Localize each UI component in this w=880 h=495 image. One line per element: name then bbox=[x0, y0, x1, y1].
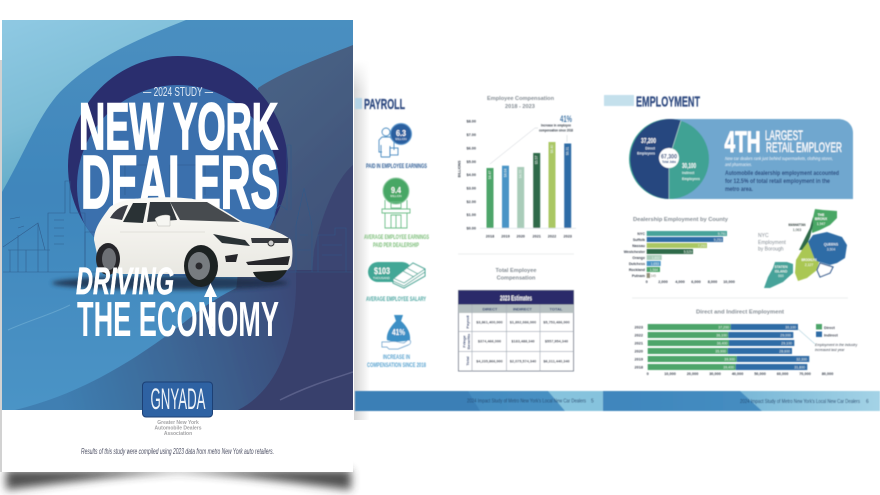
association name bbox=[155, 420, 202, 437]
panel: employment bbox=[604, 94, 857, 376]
map: NYC employment by borough: THE bbox=[818, 213, 825, 217]
icon: money bag with 41 percent in hand: 41% bbox=[392, 328, 405, 337]
x axis labels: 10,000 bbox=[664, 372, 676, 376]
year labels: 2018 bbox=[635, 366, 643, 370]
title: 2024 study: — 2024 STUDY — bbox=[143, 85, 213, 99]
y axis labels: $1.00 bbox=[466, 213, 476, 217]
table column headers: INDIRECT bbox=[513, 306, 532, 312]
year labels: 2022 bbox=[635, 334, 643, 338]
table row labels: Payroll bbox=[465, 315, 470, 329]
payroll heading bbox=[355, 97, 405, 113]
bar values: 39,900 bbox=[724, 358, 735, 362]
largest retail employer: LARGEST bbox=[765, 127, 803, 143]
pie chart: direct vs indirect: Total Jobs bbox=[662, 160, 676, 164]
footer band: left page bbox=[355, 391, 603, 411]
page gutter shade bbox=[354, 60, 370, 420]
borough: Queens bbox=[808, 232, 847, 265]
x axis: 2018 bbox=[486, 234, 494, 238]
retail note: New car dealers rank just behind supermarkets, clothing stores, bbox=[725, 156, 833, 161]
county values: 1,564 bbox=[650, 268, 658, 272]
county axis bbox=[646, 280, 735, 284]
footer band: right page: 6 bbox=[866, 399, 869, 405]
county names: Nassau bbox=[632, 244, 645, 248]
legend bbox=[816, 324, 838, 338]
city skyline bbox=[3, 145, 352, 272]
table values: $1,892,086,000 bbox=[510, 320, 536, 324]
Jamaica Bay islands bbox=[817, 263, 833, 277]
payroll stat label: PAID IN EMPLOYEE EARNINGS bbox=[366, 163, 427, 170]
white SUV car bbox=[52, 197, 292, 290]
county values: 9,791 bbox=[718, 232, 726, 236]
title: The Economy: THE ECONOMY bbox=[77, 293, 279, 347]
association name: Association bbox=[164, 431, 192, 437]
x axis labels: 0 bbox=[647, 372, 649, 376]
annotation: Employment in the industry bbox=[815, 343, 857, 347]
retail note: and pharmacies. bbox=[725, 162, 752, 167]
borough: Brooklyn bbox=[795, 242, 819, 281]
payroll stat label: AVERAGE EMPLOYEE SALARY bbox=[366, 296, 427, 303]
pie chart: direct vs indirect: Direct bbox=[645, 146, 656, 150]
x axis labels: 30,000 bbox=[709, 372, 721, 376]
employment heading: EMPLOYMENT bbox=[636, 94, 700, 110]
bars bbox=[486, 142, 571, 228]
county names: Suffolk bbox=[633, 238, 645, 242]
bar value labels: $6.31 bbox=[566, 147, 570, 155]
annotation: increased last year bbox=[815, 348, 845, 352]
footer band: left page: 5 bbox=[591, 398, 594, 404]
table title bbox=[496, 268, 536, 282]
bar value labels: $4.64 bbox=[504, 169, 508, 177]
icon: employee with 6.3 million badge: MILLION bbox=[395, 137, 407, 141]
year labels: 2020 bbox=[635, 350, 643, 354]
year labels: 2023 bbox=[635, 326, 643, 330]
association name: Automobile Dealers bbox=[155, 426, 202, 432]
bar chart: dealership employment by county: Dealership Employment by County bbox=[633, 217, 729, 223]
map title: Employment bbox=[758, 240, 786, 246]
bar values: 31,800 bbox=[794, 366, 805, 370]
county names: Dutchess bbox=[629, 262, 645, 266]
payroll stat label: INCREASE IN bbox=[383, 354, 410, 361]
table values: $557,954,340 bbox=[545, 340, 568, 344]
stacked bar chart: direct and indirect employment bbox=[635, 310, 857, 376]
pie chart: direct vs indirect: 37,200 bbox=[641, 138, 656, 145]
y axis labels: $2.00 bbox=[466, 200, 476, 204]
title: Dealers: DEALERS bbox=[81, 140, 278, 224]
bar chart: dealership employment by county bbox=[624, 217, 735, 284]
pie chart: direct vs indirect bbox=[629, 119, 709, 199]
county axis: 6,000 bbox=[691, 280, 701, 284]
county axis: 0 bbox=[646, 280, 648, 284]
retail share statement: metro area. bbox=[725, 186, 753, 193]
y axis labels: $4.00 bbox=[466, 173, 476, 177]
x axis: 2019 bbox=[501, 234, 510, 238]
map: NYC employment by borough: STATEN bbox=[774, 265, 788, 269]
callout: 41 percent increase bbox=[490, 114, 573, 164]
bar values: 32,300 bbox=[796, 358, 807, 362]
bar chart: employee compensation bbox=[458, 96, 576, 254]
table values: $3,861,400,000 bbox=[476, 320, 503, 324]
pie chart: direct vs indirect: 30,100 bbox=[682, 163, 696, 170]
panel: payroll bbox=[355, 97, 429, 369]
chart title: 2018 - 2023 bbox=[505, 104, 535, 110]
county names: Westchester bbox=[624, 250, 646, 254]
4th: 4TH bbox=[724, 126, 760, 159]
book shadow bbox=[0, 60, 351, 490]
arrow up bbox=[204, 283, 217, 334]
county names: Rockland bbox=[629, 268, 645, 272]
county values: 7,293 bbox=[698, 244, 706, 248]
map: NYC employment by borough: 1,063 bbox=[793, 228, 801, 232]
footer band: right page: 2024 Impact Study of Metro New York's Local New Car Dealers bbox=[740, 399, 860, 405]
icon: money stack with 103 thousand pill bbox=[368, 262, 425, 288]
GNYADA license plate logo bbox=[142, 382, 212, 417]
county values: 345 bbox=[650, 274, 656, 278]
table: total employee compensation bbox=[458, 268, 574, 371]
borough: Staten Island bbox=[764, 262, 793, 288]
association name: Greater New York bbox=[157, 420, 199, 426]
bar value labels: $4.47 bbox=[488, 171, 492, 179]
panel: magazine cover: GNYADA bbox=[150, 383, 206, 416]
county values bbox=[650, 232, 726, 278]
white footer strip bbox=[2, 410, 353, 472]
pie chart: direct vs indirect: Employees bbox=[637, 152, 655, 156]
icon: money stack with 103 thousand pill: THOUSAND bbox=[373, 276, 391, 280]
bar value labels: $4.55 bbox=[519, 170, 523, 178]
y axis labels: $5.00 bbox=[466, 160, 476, 164]
table column headers: TOTAL bbox=[550, 306, 563, 312]
retail note bbox=[725, 156, 833, 167]
payroll stat label: COMPENSATION SINCE 2018 bbox=[367, 362, 426, 369]
bar values: 39,400 bbox=[723, 366, 734, 370]
footer band: right page bbox=[603, 391, 880, 411]
map: NYC employment by borough: QUEENS bbox=[824, 242, 839, 246]
county values: 1,802 bbox=[652, 256, 660, 260]
icon: employee with 6.3 million badge: 6.3 bbox=[396, 128, 406, 138]
table values: $6,311,440,340 bbox=[543, 360, 570, 364]
county values: 9,253 bbox=[714, 238, 722, 242]
county names: NYC bbox=[637, 232, 645, 236]
bar values: 28,600 bbox=[779, 350, 790, 354]
payroll heading: PAYROLL bbox=[364, 97, 405, 113]
bar values: 29,100 bbox=[781, 342, 792, 346]
bar value labels: $5.57 bbox=[535, 156, 539, 164]
table title: Total Employee bbox=[496, 268, 536, 274]
x axis labels: 70,000 bbox=[799, 372, 811, 376]
map: NYC employment by borough: BRONX bbox=[815, 217, 828, 221]
table row labels: Benefits bbox=[466, 333, 471, 349]
y axis labels: $7.00 bbox=[466, 133, 476, 137]
county axis: 4,000 bbox=[675, 280, 685, 284]
callout: 41 percent increase: Increase in employee bbox=[541, 124, 571, 128]
x axis: 2022 bbox=[548, 234, 556, 238]
bar values: 29,000 bbox=[780, 334, 791, 338]
table values: $183,488,340 bbox=[511, 340, 535, 344]
title: New York: NEW YORK bbox=[79, 89, 278, 163]
x axis: 2020 bbox=[516, 234, 525, 238]
bar values: 35,900 bbox=[715, 350, 726, 354]
pie chart: direct vs indirect: Employees bbox=[682, 177, 700, 181]
y axis title: BILLIONS bbox=[458, 160, 462, 177]
map: NYC employment by borough: 3,504 bbox=[827, 248, 835, 252]
county values: 1,653 bbox=[651, 262, 659, 266]
table values: $4,235,866,000 bbox=[476, 360, 503, 364]
bar values: 36,400 bbox=[717, 342, 728, 346]
table row labels: Fringe bbox=[462, 335, 466, 348]
cover background bbox=[2, 20, 353, 410]
table column headers: DIRECT bbox=[483, 306, 498, 312]
y axis labels: $6.00 bbox=[466, 146, 476, 150]
legend: Direct bbox=[824, 326, 835, 330]
chart title bbox=[487, 96, 555, 110]
stacked bar chart: direct and indirect employment: Direct and Indirect Employment bbox=[696, 310, 784, 316]
y axis labels: $8.00 bbox=[466, 120, 476, 124]
table values: $2,075,574,340 bbox=[510, 360, 536, 364]
4th largest panel bbox=[629, 119, 853, 199]
x axis labels bbox=[647, 372, 833, 376]
bar values: 37,200 bbox=[718, 326, 729, 330]
payroll stat label: AVERAGE EMPLOYEE EARNINGS bbox=[364, 234, 429, 241]
icon: employee with 6.3 million badge bbox=[379, 124, 412, 157]
map: NYC employment by borough bbox=[758, 209, 847, 288]
borough: Bronx bbox=[812, 209, 837, 233]
map: NYC employment by borough: ISLAND bbox=[775, 270, 788, 274]
y axis labels: $0.00 bbox=[466, 226, 476, 230]
map: NYC employment by borough: 660 bbox=[778, 274, 784, 278]
payroll stat label: PAID PER DEALERSHIP bbox=[373, 242, 419, 249]
bar values bbox=[715, 326, 807, 370]
county names bbox=[624, 232, 646, 278]
county names: Orange bbox=[632, 256, 645, 260]
year labels bbox=[635, 326, 643, 370]
legend: Indirect bbox=[824, 334, 838, 338]
table values bbox=[476, 320, 570, 364]
title: Driving: DRIVING bbox=[76, 261, 174, 303]
x axis labels: 60,000 bbox=[777, 372, 788, 376]
table header: 2023 Estimates bbox=[500, 296, 532, 302]
bar values: 30,100 bbox=[785, 326, 796, 330]
largest retail employer bbox=[765, 127, 842, 155]
map: NYC employment by borough: 2,127 bbox=[805, 263, 813, 267]
table values: $5,753,486,000 bbox=[543, 320, 570, 324]
x axis: 2021 bbox=[532, 234, 541, 238]
bar values: 36,100 bbox=[716, 334, 727, 338]
study note: Results of this study were compiled using 2023 data from metro New York auto retailers. bbox=[81, 447, 274, 456]
direct bars bbox=[648, 324, 737, 370]
county axis: 10,000 bbox=[723, 280, 735, 284]
callout: 41 percent increase: 41% bbox=[560, 114, 572, 124]
navy circle emblem bbox=[68, 56, 288, 287]
county axis: 8,000 bbox=[708, 280, 717, 284]
table title: Compensation bbox=[497, 276, 536, 282]
icon: money stack with 103 thousand pill: $103 bbox=[374, 266, 390, 277]
county values: 5,529 bbox=[684, 250, 692, 254]
icon: dealership with 9.4 million badge bbox=[382, 178, 410, 228]
x axis labels: 80,000 bbox=[822, 372, 833, 376]
map: NYC employment by borough: BROOKLYN bbox=[802, 258, 817, 262]
icon: dealership with 9.4 million badge: 9.4 bbox=[391, 185, 401, 195]
icon: dealership with 9.4 million badge: MILLION bbox=[390, 194, 402, 198]
map: NYC employment by borough: 1,947 bbox=[817, 222, 825, 226]
chart title: Employee Compensation bbox=[487, 96, 555, 102]
map title: by Borough bbox=[758, 246, 784, 252]
x axis: 2023 bbox=[563, 234, 572, 238]
x axis bbox=[480, 228, 576, 238]
footer band: left page: 2024 Impact Study of Metro New York's Local New Car Dealers bbox=[467, 398, 586, 404]
pie chart: direct vs indirect: 67,300 bbox=[661, 154, 678, 160]
employment heading bbox=[604, 94, 700, 110]
year labels: 2019 bbox=[635, 358, 643, 362]
table row labels bbox=[462, 315, 471, 366]
table values: $374,466,000 bbox=[478, 340, 501, 344]
borough: Manhattan bbox=[799, 217, 813, 250]
retail share statement: Automobile dealership employment accounted bbox=[725, 170, 839, 177]
county axis: 2,000 bbox=[658, 280, 668, 284]
panel: magazine cover bbox=[2, 20, 353, 472]
county names: Putnam bbox=[632, 274, 645, 278]
callout: 41 percent increase: compensation since 2018 bbox=[539, 128, 573, 132]
year labels: 2021 bbox=[635, 342, 643, 346]
y axis labels: $3.00 bbox=[466, 186, 476, 190]
payroll stat label bbox=[367, 354, 426, 369]
map: NYC employment by borough: MANHATTAN bbox=[788, 223, 806, 227]
table grid bbox=[458, 304, 574, 371]
table column headers bbox=[458, 304, 574, 313]
x axis labels: 40,000 bbox=[732, 372, 743, 376]
map title: NYC bbox=[758, 233, 769, 239]
map title bbox=[758, 233, 786, 252]
annotation bbox=[798, 329, 857, 352]
payroll stat label bbox=[364, 234, 429, 249]
pie chart: direct vs indirect: Indirect bbox=[682, 171, 695, 175]
x axis labels: 20,000 bbox=[687, 372, 698, 376]
county bars bbox=[647, 231, 727, 278]
x axis labels: 50,000 bbox=[754, 372, 766, 376]
table body bbox=[458, 290, 574, 371]
y axis labels bbox=[466, 120, 476, 230]
retail share statement: for 12.5% of total retail employment in the bbox=[725, 178, 830, 185]
indirect bars bbox=[728, 324, 809, 370]
table row labels: Total bbox=[465, 356, 470, 366]
bar value labels bbox=[488, 145, 570, 179]
icon: money bag with 41 percent in hand bbox=[382, 315, 411, 349]
bar value labels: $6.40 bbox=[550, 145, 554, 153]
retail share statement bbox=[725, 170, 839, 193]
